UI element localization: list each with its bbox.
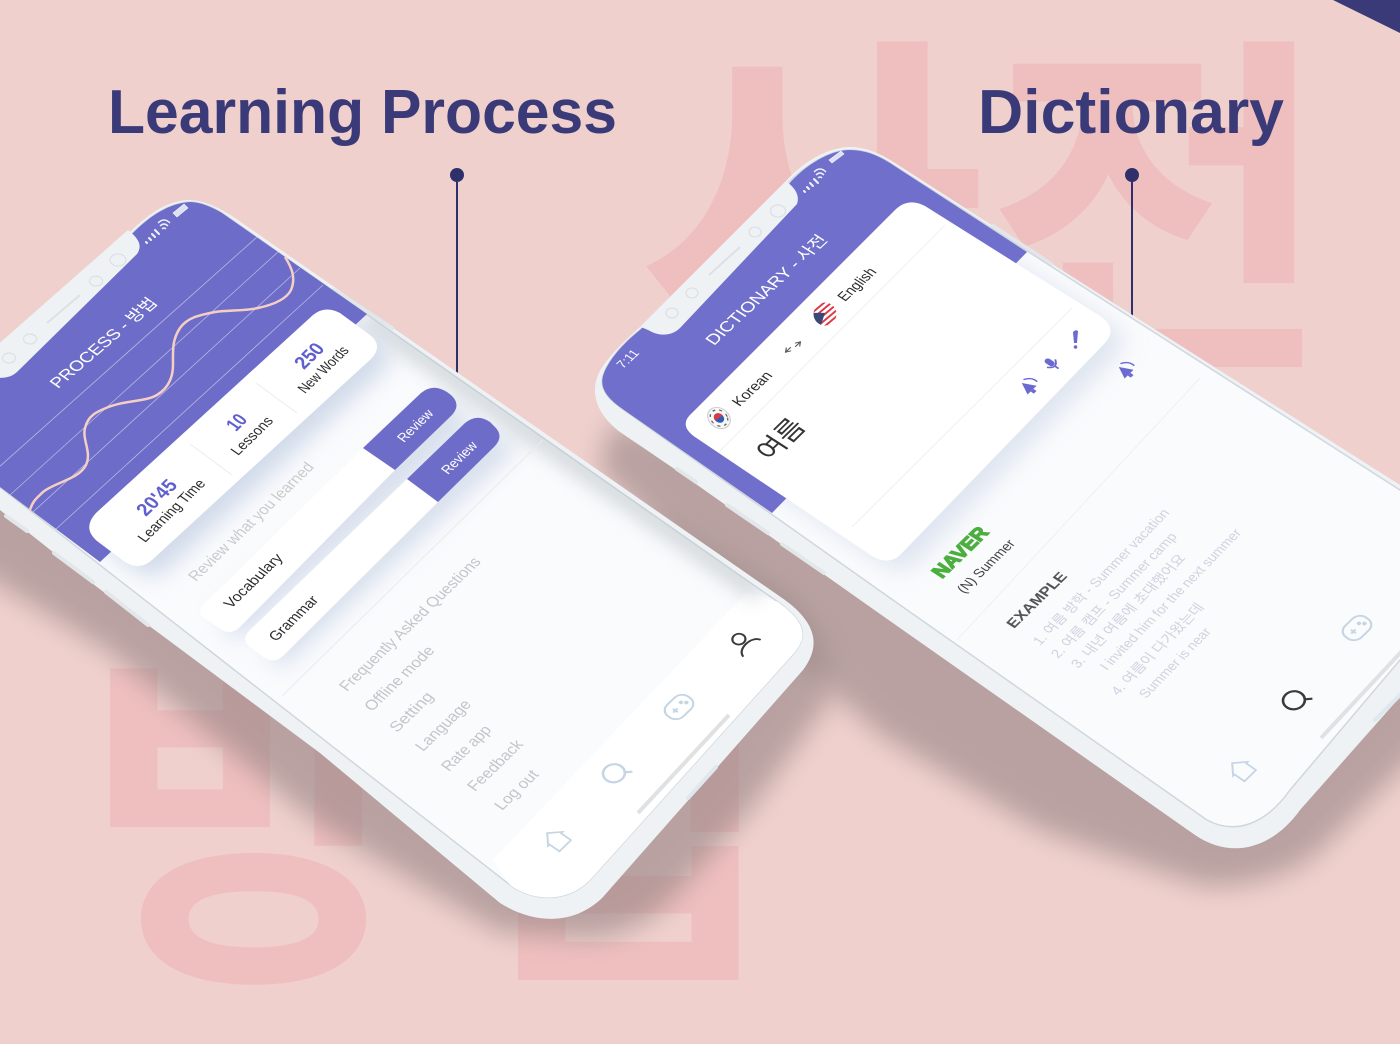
row shadow: [219, 400, 519, 670]
example list: 1. 여름 방학 - Summer vacation: [1029, 506, 1173, 648]
stat: learning time: Learning Time: [134, 477, 209, 545]
menu list: Language: [412, 697, 475, 754]
row: grammar: Grammar: [265, 593, 322, 644]
connector: Dictionary: [1125, 168, 1139, 318]
icon: home: [1225, 756, 1257, 783]
example list: 2. 여름 캠프 - Summer camp: [1047, 530, 1180, 661]
example list: 4. 여름이 다가왔는데: [1107, 600, 1207, 698]
corner triangle: [1333, 0, 1400, 33]
header bar: [602, 150, 1027, 513]
menu list: Feedback: [464, 737, 528, 794]
example list: I invited him for the next summer: [1096, 526, 1245, 673]
stat: learning time: 20'45: [132, 476, 183, 520]
dictionary source: NAVER: NAVER: [928, 523, 994, 582]
background hangul: dictionary: 사전: [638, 18, 1334, 418]
stat: lessons: Lessons: [227, 414, 277, 458]
app title: DICTIONARY - 사전: [701, 232, 832, 348]
screen: [602, 150, 1400, 827]
menu list: Rate app: [438, 723, 496, 774]
menu list: Frequently Asked Questions: [336, 555, 485, 694]
home indicator: [638, 715, 729, 813]
label: Korean: Korean: [729, 369, 777, 409]
side buttons: [6, 290, 716, 798]
icon: pen: [1073, 330, 1078, 349]
row: vocabulary: Review: [393, 406, 437, 445]
icon: swap arrows: [783, 338, 803, 356]
status icons: [804, 151, 844, 192]
meaning: (N) Summer: [953, 536, 1019, 596]
icon: microphone: [1041, 355, 1063, 373]
app title: PROCESS - 방법: [46, 295, 162, 391]
stats card shadow: [103, 319, 391, 576]
screen edge shade: [367, 316, 760, 592]
notch: [0, 230, 140, 378]
divider: [282, 440, 543, 696]
example list: Summer is near: [1135, 625, 1215, 701]
icon: user: [725, 627, 761, 657]
phone body: [595, 147, 1400, 848]
title: Learning Process: Learning Process: [108, 78, 617, 147]
icon: game: [661, 692, 697, 722]
title: Dictionary: Dictionary: [978, 78, 1285, 147]
icon: speaker outside card: [1113, 359, 1139, 381]
notch: [640, 181, 798, 335]
icon: search: [599, 759, 632, 787]
stats card: [89, 309, 377, 566]
stat: new words: 250: [290, 339, 330, 373]
stat: new words: New Words: [294, 343, 353, 396]
phone shadow: right: [600, 425, 1400, 886]
dictionary card: [686, 202, 1110, 561]
example list: 3. 내년 여름에 초대했어요: [1067, 551, 1189, 671]
label: English: English: [834, 265, 881, 304]
home indicator: [1321, 651, 1400, 738]
icon: search: [1279, 686, 1312, 714]
menu list: Log out: [491, 767, 543, 813]
icon: home: [540, 826, 572, 853]
stat: lessons: 10: [222, 410, 252, 435]
background hangul: method: 방법: [86, 623, 806, 1030]
menu list: Setting: [386, 689, 438, 735]
icon: speaker: [1016, 375, 1042, 397]
phone: process: [0, 200, 814, 919]
section label: Review what you learned: [185, 460, 318, 584]
row: vocabulary: Vocabulary: [220, 551, 287, 611]
icon: game: [1339, 612, 1375, 644]
phone: dictionary: [595, 147, 1400, 848]
nav bar: [493, 592, 802, 898]
wave chart: [0, 237, 323, 530]
status icons: [146, 204, 188, 243]
divider: [957, 378, 1200, 640]
menu list: [336, 555, 543, 813]
row: grammar: [245, 418, 500, 660]
example list: [1029, 506, 1245, 701]
word: summer: 여름: [750, 414, 812, 465]
heading: example: EXAMPLE: [1003, 569, 1071, 631]
flag: USA: [814, 302, 836, 326]
card shadow: [700, 212, 1124, 571]
row: vocabulary: [200, 388, 457, 632]
phone body: [0, 200, 814, 919]
phone shadow: left: [0, 480, 830, 938]
connector: Learning Process: [450, 168, 464, 375]
time: 7:11: [613, 347, 642, 371]
side buttons: [677, 226, 1400, 720]
row: grammar: Review: [437, 438, 481, 477]
screen: [0, 202, 802, 898]
header bar: [0, 202, 367, 562]
flag: Korea: [705, 407, 733, 429]
menu list: Offline mode: [361, 643, 439, 714]
